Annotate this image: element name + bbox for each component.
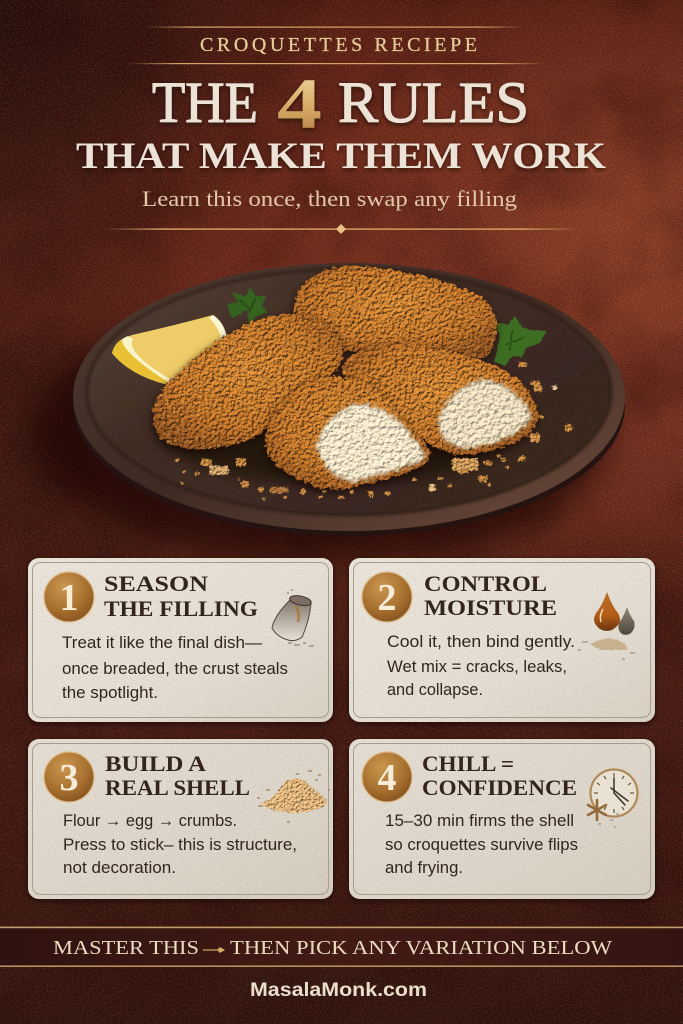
heading 4: CHILL = [422,751,514,776]
heading 1 [104,571,258,621]
body text 1: Treat it like the final dish— [62,634,263,652]
body text 1: the spotlight. [62,684,158,702]
title line 1 [152,64,529,144]
body text 4: 15–30 min firms the shell [385,812,574,830]
croquette: front, cut open [265,376,431,490]
body text 4 [385,812,578,877]
body text 2: Wet mix = cracks, leaks, [387,658,567,676]
food shadow [160,380,510,484]
croquette: back [293,266,497,358]
body text 3: Flour → egg → crumbs. [63,812,237,830]
body text 2: Cool it, then bind gently. [387,633,575,651]
body text 4: so croquettes survive flips [385,836,578,854]
number badge 3 [44,752,94,802]
icon: salt shaker [272,590,314,646]
panel: rule 3 build a real shell [28,739,333,899]
parsley left [227,287,268,325]
plate shadow [30,304,610,560]
footer band [0,927,683,967]
header block [76,26,606,234]
title line 1: RULES [338,70,529,135]
body text 3: Press to stick– this is structure, [63,836,297,854]
heading 1: SEASON [104,571,208,596]
number badge 1: 1 [60,577,78,619]
body text 3: not decoration. [63,859,176,877]
lemon wedge [112,315,227,384]
number badge 2 [362,572,412,622]
heading 4 [422,751,577,800]
title line 1: 4 [277,64,322,144]
body text 2 [387,633,575,699]
heading 3 [105,751,250,800]
body text 3 [63,812,297,877]
body text 1 [62,634,288,702]
divider with diamond [103,224,581,234]
title line 2: THAT MAKE THEM WORK [76,136,606,177]
parsley right [494,316,547,366]
panel: rule 2 control moisture [349,558,655,722]
croquette: right, cut open [342,343,538,455]
number badge 3: 3 [60,757,78,799]
heading 2: MOISTURE [424,595,557,620]
subtitle: Learn this once, then swap any filling [142,186,517,211]
heading 2: CONTROL [424,571,547,596]
eyebrow: croquettes reciepe: CROQUETTES RECIEPE [200,34,477,56]
heading 2 [424,571,557,620]
heading 1: THE FILLING [104,596,258,621]
croquette: left [153,314,343,449]
body text 4: and frying. [385,859,463,877]
heading 4: CONFIDENCE [422,775,577,800]
number badge 2: 2 [378,577,396,619]
number badge 4 [362,752,412,802]
number badge 4: 4 [378,757,396,799]
body text 2: and collapse. [387,681,483,699]
panel: rule 1 season the filling [28,558,333,722]
body text 1: once breaded, the crust steals [62,660,288,678]
plate of croquettes [30,263,625,560]
number badge 1 [44,572,94,622]
title line 1: THE [152,70,258,135]
plate [73,263,625,536]
panel: rule 4 chill = confidence [349,739,655,899]
icon: pile of breadcrumbs [257,771,330,822]
website credit: MasalaMonk.com [250,980,427,1001]
icon: clock with snowflake [588,770,638,827]
heading 3: REAL SHELL [105,775,250,800]
banner text: master this: MASTER THIS [53,937,199,959]
heading 3: BUILD A [105,751,206,776]
banner text: then pick any variation below: THEN PICK ANY VARIATION BELOW [230,937,612,959]
icon: oil and water drops with crumbs [578,592,635,659]
crumbs on plate [175,362,572,500]
arrow [203,947,225,953]
